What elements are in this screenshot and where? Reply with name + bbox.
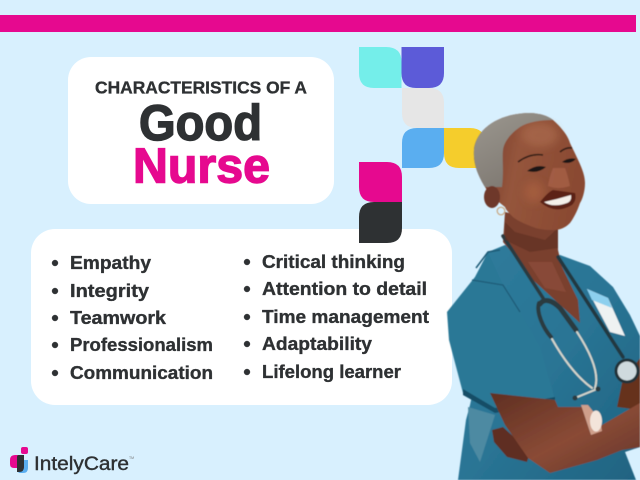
right column list: Time management [262,306,429,327]
lower shirt shade [468,407,495,462]
list panel [31,229,452,405]
ear [484,186,500,208]
chest highlight [528,262,566,292]
neck and chest [503,212,580,323]
left column list: Professionalism [70,334,213,355]
brow right [560,148,572,152]
right column list [244,251,429,382]
nurse photo illustration [447,113,640,480]
top pink bar [0,15,636,32]
title word: good: Good [139,95,262,151]
left column list: Communication [70,362,213,383]
stethoscope chest piece [614,358,640,384]
decorative logo blocks [359,47,485,243]
short hair [474,113,553,187]
head [474,113,585,230]
right column list: Critical thinking [262,251,405,272]
left column list: Integrity [70,280,150,301]
nose [548,168,570,188]
title panel [68,57,334,204]
logo icon [10,447,28,473]
forehead highlight [522,123,558,147]
shoulder seam [472,280,520,312]
mouth [540,190,576,209]
neck shadow under chin [505,222,558,252]
left column list: Teamwork [70,307,167,328]
teeth [544,195,571,205]
id badge [587,289,625,336]
title line: characteristics of a: CHARACTERISTICS OF A [95,78,307,98]
trademark: TM [129,456,134,460]
earring [497,207,505,215]
right column list: Adaptability [262,333,373,354]
logo wordmark: IntelyCare [34,453,129,475]
sleeve [447,252,555,412]
sleeve hem [463,389,555,413]
right column list: Attention to detail [262,278,427,299]
right crossed hand [617,358,640,410]
wristwatch [581,405,602,435]
back hand [492,427,530,462]
left column list: Empathy [70,252,152,273]
scrubs torso [458,245,640,480]
eye left [527,166,546,172]
crossed forearm and upper arm [490,393,640,473]
brow left [518,155,543,162]
left column list [52,252,213,383]
eye right [562,158,576,163]
IntelyCare logo [10,447,134,475]
cheek highlight [524,181,544,203]
right column list: Lifelong learner [262,361,401,382]
stethoscope [503,236,623,400]
collar shadow [476,250,500,268]
head shape and face [474,113,585,230]
title word: nurse: Nurse [133,140,270,194]
